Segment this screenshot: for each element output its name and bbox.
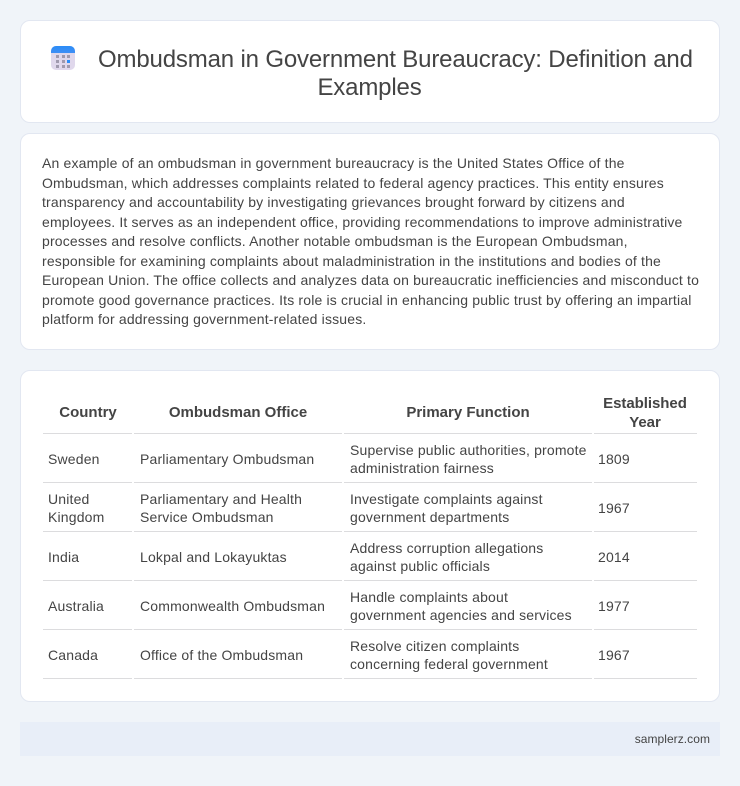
row: United Kingdom: United bbox=[48, 491, 90, 507]
row: India: against public officials bbox=[350, 558, 490, 574]
row: Canada: Office of the Ombudsman bbox=[140, 647, 303, 663]
row: Sweden: administration fairness bbox=[350, 460, 494, 476]
text block: description: processes and resolve conflicts. Another notable ombudsman is the European Ombudsman, bbox=[42, 233, 628, 249]
text block: description: employees. It serves as an independent office, providing recommendations to improve administrative bbox=[42, 214, 683, 230]
row: Canada: Canada bbox=[48, 647, 98, 663]
row: Sweden: Parliamentary Ombudsman bbox=[140, 451, 314, 467]
text block: description: European Union. The office collects and analyzes data on bureaucratic inefficiencies and misconduct to bbox=[42, 272, 699, 288]
row: United Kingdom: Parliamentary and Health bbox=[140, 491, 302, 507]
row: Sweden bbox=[48, 442, 630, 476]
row: Sweden: Sweden bbox=[48, 451, 100, 467]
footer text: samplerz.com bbox=[635, 732, 710, 746]
footer bbox=[20, 722, 720, 756]
row: Australia: Commonwealth Ombudsman bbox=[140, 598, 325, 614]
table header bbox=[59, 395, 687, 431]
table header: Year bbox=[629, 414, 661, 431]
panel: title card bbox=[20, 20, 720, 123]
row: United Kingdom: Kingdom bbox=[48, 509, 104, 525]
panel: description card bbox=[20, 133, 720, 350]
row: India: Lokpal and Lokayuktas bbox=[140, 549, 287, 565]
row: Canada: 1967 bbox=[598, 647, 630, 663]
table header: Ombudsman Office bbox=[169, 404, 307, 421]
title bbox=[98, 46, 693, 101]
row: Sweden: Supervise public authorities, promote bbox=[350, 442, 587, 458]
text block: description: An example of an ombudsman in government bureaucracy is the United States Office of the bbox=[42, 155, 625, 171]
text block: description: transparency and accountability by investigating grievances brought forward by citizens and bbox=[42, 194, 625, 210]
row: Canada: concerning federal government bbox=[350, 656, 548, 672]
icon: calendar bbox=[51, 46, 75, 70]
table: ombudsman offices bbox=[43, 395, 697, 679]
row: Australia bbox=[48, 589, 630, 623]
row: Australia: Australia bbox=[48, 598, 104, 614]
row: India: Address corruption allegations bbox=[350, 540, 543, 556]
table header: Country bbox=[59, 404, 117, 421]
row: Canada bbox=[48, 638, 630, 672]
row: India: India bbox=[48, 549, 79, 565]
text block: description: Ombudsman, which addresses complaints related to federal agency practices. This entity ensures bbox=[42, 175, 664, 191]
row: United Kingdom bbox=[48, 491, 630, 525]
table header: Established bbox=[603, 395, 687, 412]
panel: table card bbox=[20, 370, 720, 702]
row: Australia: government agencies and services bbox=[350, 607, 572, 623]
row: Australia: Handle complaints about bbox=[350, 589, 508, 605]
row: India bbox=[48, 540, 630, 574]
row: Sweden: 1809 bbox=[598, 451, 630, 467]
text block: description bbox=[42, 155, 699, 327]
row: United Kingdom: government departments bbox=[350, 509, 509, 525]
title: Examples bbox=[317, 74, 422, 101]
row: United Kingdom: Service Ombudsman bbox=[140, 509, 274, 525]
table header: Primary Function bbox=[406, 404, 530, 421]
row: Australia: 1977 bbox=[598, 598, 630, 614]
title: Ombudsman in Government Bureaucracy: Definition and bbox=[98, 46, 693, 73]
row: United Kingdom: Investigate complaints against bbox=[350, 491, 543, 507]
text block: description: responsible for examining complaints about maladministration in the institutions and bodies of the bbox=[42, 253, 661, 269]
row: India: 2014 bbox=[598, 549, 630, 565]
text block: description: platform for addressing government-related issues. bbox=[42, 311, 366, 327]
text block: description: promote good governance practices. Its role is crucial in enhancing public trust by offering an impartial bbox=[42, 292, 691, 308]
row: United Kingdom: 1967 bbox=[598, 500, 630, 516]
row: Canada: Resolve citizen complaints bbox=[350, 638, 519, 654]
